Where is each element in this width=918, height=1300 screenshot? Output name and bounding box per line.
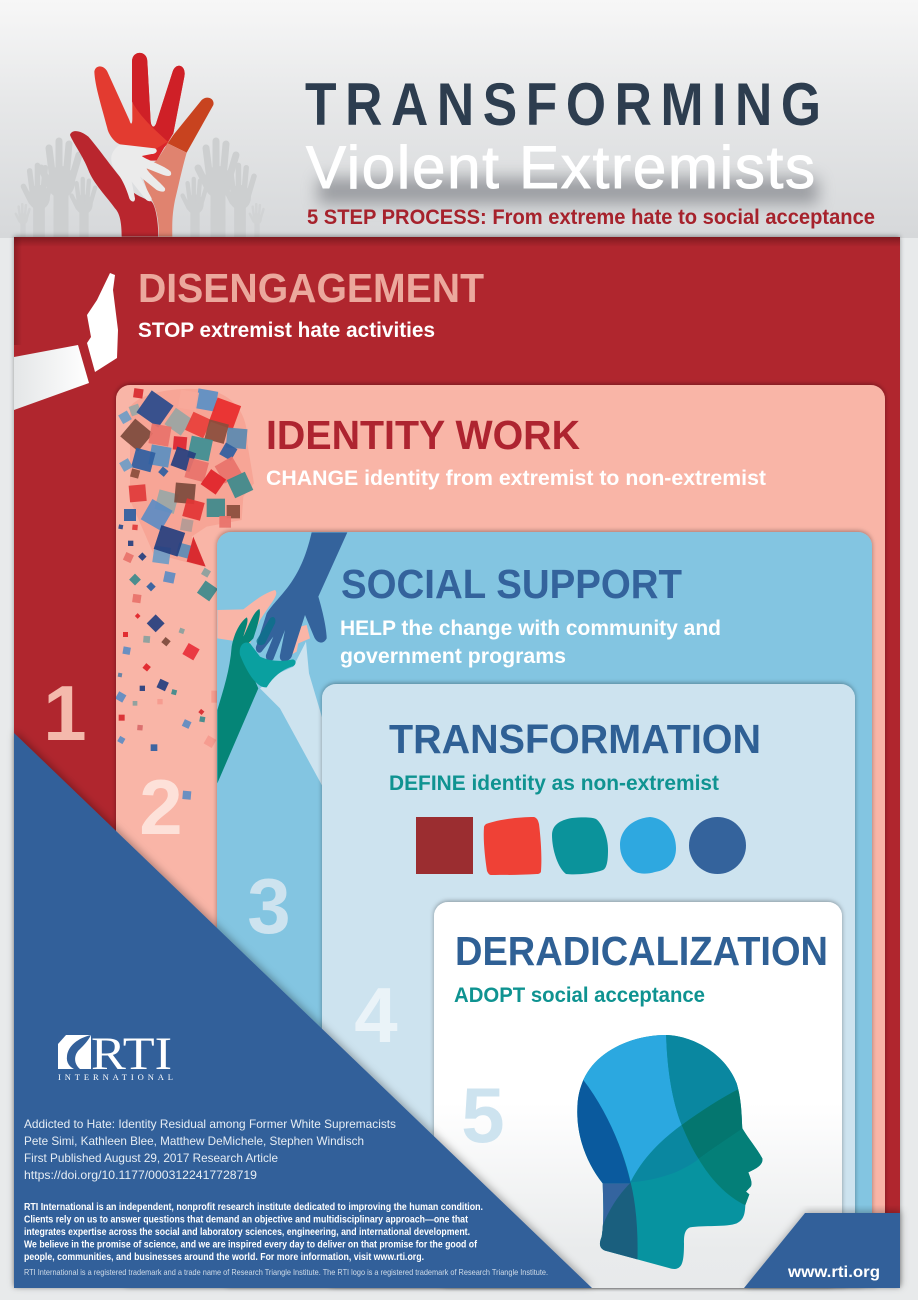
text: citation: Addicted to Hate: Identity Residual among Former White Supremacists — [24, 1117, 396, 1131]
text: disengagement action: STOP extremist hate activities — [138, 319, 435, 342]
text: deradicalization action: ADOPT social acceptance — [454, 984, 705, 1007]
text: citation: Pete Simi, Kathleen Blee, Matthew DeMichele, Stephen Windisch — [24, 1134, 364, 1148]
title: TRANSFORMING — [305, 70, 821, 138]
number 1: 1 — [43, 669, 87, 757]
logo: RTI International: INTERNATIONAL — [58, 1072, 173, 1082]
icon: multicolour head profile — [577, 1035, 762, 1269]
text: citation: https://doi.org/10.1177/0003122417728719 — [24, 1168, 257, 1182]
text: website: www.rti.org — [787, 1264, 880, 1281]
blue triangle panel — [14, 733, 592, 1288]
heading: deradicalization: DERADICALIZATION — [455, 928, 828, 974]
icon: reaching hands — [217, 532, 347, 786]
text: citation — [24, 1117, 396, 1182]
text: about RTI: We believe in the promise of science, and we are inspired every day to deliver on that promise for the good of — [24, 1240, 478, 1250]
text: social support action: HELP the change with community and — [340, 617, 721, 640]
website tab — [744, 1213, 900, 1288]
heading: transformation: TRANSFORMATION — [389, 716, 761, 762]
background crowd of raised hands — [16, 141, 263, 250]
text: citation: First Published August 29, 2017 Research Article — [24, 1151, 278, 1165]
text: about RTI — [24, 1202, 483, 1263]
logo: RTI International: RTI — [91, 1028, 172, 1080]
text: about RTI: integrates expertise across the social and laboratory sciences, engineering, and international development. — [24, 1227, 470, 1238]
text: about RTI: RTI International is an independent, nonprofit research institute dedicated to improving the human condition. — [24, 1202, 483, 1213]
panel: step 3 social support — [217, 532, 872, 1288]
number 3: 3 — [247, 862, 291, 950]
panel: step 2 identity work — [115, 385, 885, 1288]
text: transformation action: DEFINE identity as non-extremist — [389, 772, 719, 795]
text: about RTI: people, communities, and businesses around the world. For more information, visit www.rti.org. — [24, 1252, 424, 1263]
icons: square morphing into circle — [416, 817, 746, 875]
text: identity work action: CHANGE identity from extremist to non-extremist — [266, 467, 766, 490]
title: Violent Extremists — [306, 134, 815, 201]
heading: social support: SOCIAL SUPPORT — [341, 561, 682, 607]
heading: disengagement: DISENGAGEMENT — [138, 265, 484, 311]
panel: step 5 deradicalization — [434, 902, 842, 1288]
number 4: 4 — [354, 971, 398, 1059]
text: social support action: government programs — [340, 645, 566, 668]
text: trademark notice: RTI International is a registered trademark and a trade name of Research Triangle Institute. The RTI logo is a registered trademark of Research Triangle Institute. — [24, 1267, 548, 1277]
number 5: 5 — [461, 1071, 505, 1159]
title — [305, 70, 821, 204]
heading: identity work: IDENTITY WORK — [266, 412, 580, 458]
text: about RTI: Clients rely on us to answer questions that demand an objective and multidisciplinary approach—one that — [24, 1214, 469, 1226]
icon: stop hand sleeve — [14, 273, 118, 410]
number 2: 2 — [139, 763, 183, 851]
subtitle: 5 STEP PROCESS: From extreme hate to social acceptance — [307, 205, 875, 229]
panel: step 4 transformation — [322, 684, 855, 1288]
panel: step 1 disengagement — [14, 237, 900, 1288]
icon: head dissolving into squares — [115, 388, 254, 800]
logo: RTI International — [58, 1028, 173, 1082]
icon: red helping hands — [70, 53, 214, 237]
